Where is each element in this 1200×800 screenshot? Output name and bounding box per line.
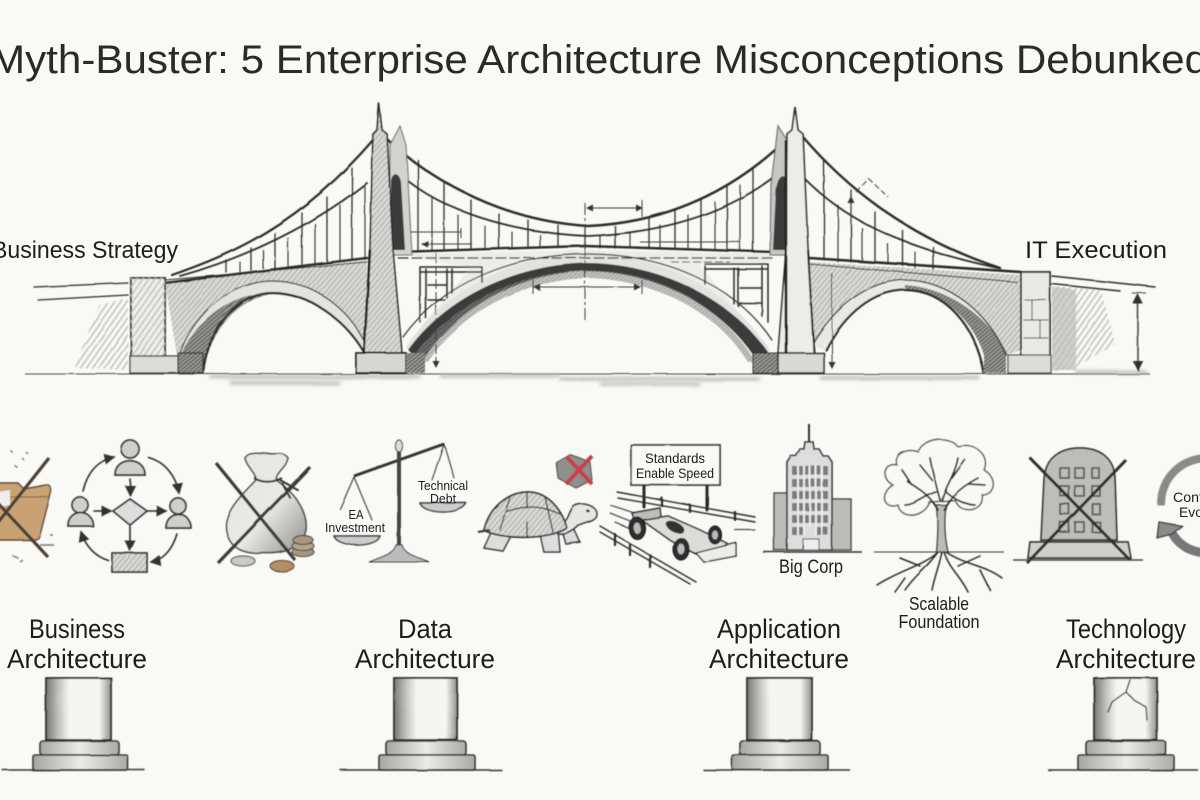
sign text: enable speed: Enable Speed xyxy=(636,465,714,481)
centre span with arch xyxy=(398,246,772,362)
right span with arch xyxy=(809,258,1021,373)
pillar: application architecture xyxy=(703,678,850,770)
icon: crossed-out stone tablet xyxy=(1013,448,1143,563)
centre span windows xyxy=(420,264,768,322)
heading line: architecture: Architecture xyxy=(1056,644,1196,674)
pillar: data architecture xyxy=(340,678,502,770)
icon: continuous evolution cycle xyxy=(1157,458,1200,553)
scale label: investment: Investment xyxy=(325,520,385,535)
heading line: data: Data xyxy=(398,614,453,644)
pillar heading: business architecture xyxy=(7,614,147,674)
icon: crossed-out speed marker xyxy=(556,454,592,488)
heading line: business: Business xyxy=(29,614,125,644)
heading line: architecture: Architecture xyxy=(7,644,147,674)
icon: tree with roots xyxy=(874,439,1004,592)
bridge label: it execution: IT Execution xyxy=(1025,237,1167,264)
heading line: architecture: Architecture xyxy=(709,644,849,674)
icon label: scalable foundation xyxy=(898,594,980,632)
label line: scalable: Scalable xyxy=(909,594,969,614)
bridge illustration xyxy=(25,103,1155,384)
pillar: technology architecture, cracked xyxy=(1048,678,1198,770)
pillar: business architecture xyxy=(2,678,145,770)
racing car body xyxy=(629,508,736,562)
left approach and hatching xyxy=(34,283,128,370)
right tower xyxy=(753,107,824,373)
icon: crossed-out money bag xyxy=(214,453,314,572)
pillar heading: application architecture xyxy=(709,614,849,674)
label line: foundation: Foundation xyxy=(898,612,980,632)
pillar heading: data architecture xyxy=(355,614,495,674)
water and ground shading xyxy=(25,372,1150,384)
icon: racing car on a highway xyxy=(600,445,755,584)
left span with arch xyxy=(165,258,367,373)
heading line: application: Application xyxy=(717,614,841,644)
icon: balance scale xyxy=(325,440,468,562)
heading line: architecture: Architecture xyxy=(355,644,495,674)
heading line: technology: Technology xyxy=(1066,614,1186,644)
right abutment xyxy=(1008,272,1051,373)
icon: big corporate skyscraper xyxy=(763,424,862,552)
title: Myth-Buster: 5 Enterprise Architecture Misconceptions Debunked xyxy=(0,38,1200,82)
icon: flow diagram with people xyxy=(68,440,191,572)
left tower xyxy=(356,103,425,373)
icon: tortoise xyxy=(478,492,597,552)
scale label: debt: Debt xyxy=(430,491,456,506)
sign text: standards: Standards xyxy=(645,450,705,466)
scale label: technical: Technical xyxy=(418,478,468,493)
scale label: ea: EA xyxy=(348,507,364,522)
left abutment xyxy=(130,278,203,373)
icon: crossed-out folder xyxy=(0,450,54,562)
dimension lines and arrows xyxy=(410,178,1146,370)
pillar heading: technology architecture xyxy=(1056,614,1196,674)
icon label: big corp: Big Corp xyxy=(779,557,843,578)
suspension cables and hangers xyxy=(172,137,1000,276)
right approach and hatching xyxy=(1052,276,1155,370)
